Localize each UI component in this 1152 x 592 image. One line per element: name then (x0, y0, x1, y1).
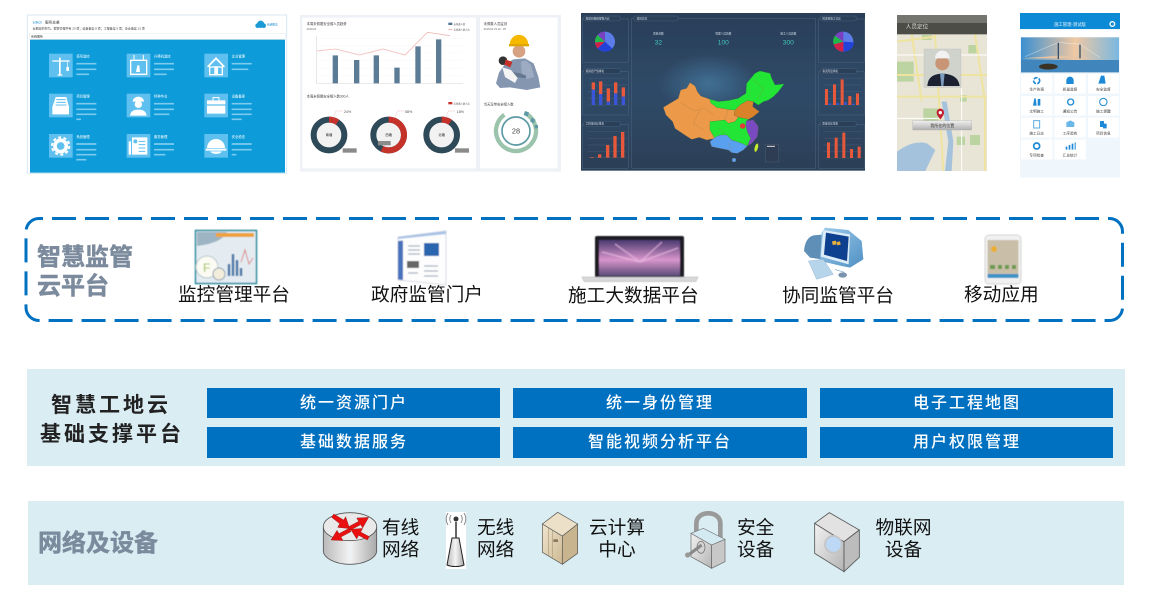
panel heading: 智慧监管 (37, 244, 133, 271)
app menu grid: 项目信息 (1096, 130, 1111, 135)
tile: enterprise (204, 54, 252, 77)
label: security devices: 安全 (737, 517, 775, 538)
button: resource portal: 统一资源门户 (300, 393, 408, 412)
panel titles: 客流月度排名 (822, 69, 839, 73)
donut: north (426, 110, 469, 153)
icon: router (323, 513, 377, 564)
panel titles: 项目总览 (637, 16, 648, 20)
donut: north: 18% (457, 110, 465, 114)
button: base data service (207, 427, 500, 458)
button: video analysis: 智能视频分析平台 (588, 432, 732, 451)
panel frames (582, 18, 864, 168)
bars right bottom (827, 133, 861, 158)
map roads and water (897, 34, 987, 171)
panel titles: 按资质产值排名 (586, 69, 605, 73)
label: wired network: 有线 (382, 517, 419, 538)
icon: monitoring screen (196, 230, 256, 284)
donut: west: 58% (405, 110, 413, 114)
button: engineering map (820, 388, 1113, 418)
label: wireless network: 无线 (477, 517, 514, 538)
label: IoT devices (876, 517, 931, 560)
label: collaborative platform: 协同监管平台 (782, 285, 894, 306)
tile: safety: 安全检查 (232, 134, 246, 139)
donut: west: 西塘 (385, 132, 393, 137)
panel heading: 云平台 (37, 272, 109, 300)
tile: elevator: 升降机监控 (154, 54, 171, 59)
screenshot: mobile app (1020, 13, 1120, 178)
portal header text: 服务总桌 (45, 20, 60, 25)
button: resource portal (207, 388, 500, 418)
label: construction big data platform: 施工大数据平台 (568, 285, 699, 306)
app menu grid: 质量监督 (1063, 87, 1078, 92)
label: cloud data center: 云计算 (589, 517, 645, 538)
tile: records: 服务管理 (154, 134, 168, 139)
location button: 我所在的位置 (930, 122, 954, 128)
icon: laptop (582, 236, 698, 282)
app menu grid (1021, 74, 1119, 159)
panel titles: 按项目规模报警占比 (586, 16, 610, 20)
label: wireless network: 网络 (477, 539, 514, 560)
screenshot: big data map (581, 13, 865, 171)
icon: smartphone (985, 235, 1021, 284)
platform heading (40, 394, 184, 446)
donut title: 本周未佩戴安全帽人数300人 (307, 94, 350, 99)
chart title (307, 21, 347, 31)
app menu grid: 施工提醒 (1096, 108, 1111, 113)
app menu grid: 汇总统计 (1063, 152, 1078, 157)
screenshot: personnel location phone (897, 15, 987, 171)
icon: monitoring screen: F (203, 261, 210, 275)
icon: padlock (685, 513, 725, 568)
portal header text (33, 20, 145, 31)
label: security devices: 设备 (737, 539, 775, 560)
panel: base support platform (27, 369, 1125, 466)
button: engineering map: 电子工程地图 (913, 394, 1021, 412)
stats: 管理人员总数 (715, 31, 732, 35)
stats: 300 (783, 40, 794, 47)
icon: government portal window (398, 231, 446, 285)
panel: network and devices (28, 501, 1124, 585)
chart title: 本周未佩戴安全帽人员趋势 (307, 21, 347, 26)
banner photo (1021, 37, 1119, 72)
tile: system: 系统管理 (76, 134, 90, 139)
donut legend: 未佩戴人数占比 (454, 101, 471, 105)
label: wireless network (477, 517, 514, 560)
label: wired network: 网络 (382, 539, 419, 560)
portal header text: 近期应的你为。据警管理共有 20 项；设备备案 8 项；工程备案 9 项；企业备案 13 项 (33, 26, 145, 31)
cloud icon (255, 21, 278, 28)
button: base data service: 基础数据服务 (300, 433, 408, 451)
donut: north: 北塘 (438, 132, 446, 137)
icon: server cabinet (542, 512, 578, 564)
tile: records (127, 134, 174, 158)
location button (913, 121, 972, 130)
chart legend: 未佩戴人数 (454, 22, 466, 26)
stats: 32 (655, 40, 662, 47)
tile: project: 项目管理 (76, 94, 90, 99)
label: security devices (737, 517, 775, 560)
app menu grid: 文明施工 (1029, 108, 1044, 113)
button: video analysis (513, 427, 807, 458)
panel titles (584, 16, 856, 126)
tile: project (49, 94, 96, 119)
tile: elevator (127, 54, 174, 77)
label: monitoring platform: 监控管理平台 (178, 284, 290, 305)
panel: smart supervision cloud platform (26, 218, 1122, 320)
monitoring heading (484, 21, 508, 31)
portrait (924, 49, 961, 87)
tile: crane: 塔吊监控 (76, 54, 90, 59)
count ring (489, 104, 543, 158)
screenshot: safety helmet dashboard (300, 15, 561, 172)
monitoring heading: 未佩戴人员监测 (484, 21, 508, 26)
panel titles: 工程量对比排名 (586, 122, 605, 126)
stats: 100 (718, 40, 729, 47)
label: wired network (382, 517, 419, 560)
tile: equipment: 设备备案 (232, 94, 246, 99)
tile: enterprise: 企业管理 (232, 54, 246, 59)
icon: wireless antenna (446, 512, 466, 569)
tile: safety (204, 134, 252, 158)
count ring: 28 (512, 127, 520, 136)
icon: IoT device box (815, 513, 859, 572)
chart title: 2018.04 (307, 27, 317, 31)
service bar (29, 33, 285, 39)
app menu grid: 施工日志 (1029, 130, 1044, 135)
app menu grid: 工序验收 (1063, 130, 1078, 135)
count heading: 当天没带安全帽人数 (484, 101, 514, 106)
label: IoT devices: 物联网 (876, 517, 931, 538)
screenshot: desktop portal (27, 15, 287, 173)
worker figure (496, 35, 540, 90)
donut: south (314, 110, 357, 153)
tile: special work: 特种作业 (154, 94, 168, 99)
label: mobile app: 移动应用 (964, 284, 1039, 305)
service bar: 系统服务 (31, 33, 43, 38)
label: IoT devices: 设备 (885, 539, 922, 560)
platform heading: 智慧工地云 (51, 394, 171, 417)
network heading: 网络及设备 (38, 529, 158, 557)
south sea inset (766, 144, 778, 162)
stats: 项目总数 (653, 31, 664, 35)
chart legend (448, 22, 471, 31)
icon: desktop computer (804, 228, 863, 279)
label: government portal: 政府监管门户 (371, 284, 483, 305)
right pie (833, 32, 854, 52)
panel heading (37, 244, 133, 300)
title bar (897, 15, 987, 34)
button: identity management (513, 388, 807, 418)
label: cloud data center: 中心 (598, 539, 636, 560)
blue panel (30, 40, 285, 173)
donut legend (448, 101, 471, 105)
map of China (663, 71, 784, 162)
bars bottom left (590, 132, 624, 158)
stats (653, 31, 797, 47)
button: permission management (820, 427, 1113, 458)
location pin (937, 109, 944, 119)
app menu grid: 安全监督 (1096, 87, 1111, 92)
app header: 施工管理-测试版 (1054, 21, 1087, 28)
donut: west (373, 110, 413, 150)
app menu grid: 专项检查 (1029, 152, 1044, 157)
button: identity management: 统一身份管理 (606, 393, 714, 412)
button: permission management: 用户权限管理 (913, 432, 1021, 451)
cloud icon: 系统图表 (267, 23, 278, 27)
chart grid lines (588, 78, 862, 158)
monitoring heading: 2018.04.23 10 : 25 (484, 27, 506, 31)
donut: south: 24% (344, 110, 352, 114)
notice bar (1020, 30, 1120, 37)
stacked bars (592, 81, 625, 105)
tile: system (49, 134, 96, 160)
app header (1020, 13, 1120, 29)
bar and line chart (317, 32, 463, 83)
portal header text: sdkcn (33, 21, 42, 25)
stats: 施工人员总数 (780, 31, 797, 35)
donut: south: 南塘 (326, 132, 333, 137)
platform heading: 基础支撑平台 (40, 422, 184, 446)
label: cloud data center (589, 517, 645, 560)
tile: equipment (204, 94, 252, 119)
tile: crane (49, 54, 96, 77)
panel titles: 按项目施工占比 (822, 16, 841, 20)
tile: special work (127, 94, 174, 117)
panel titles: 质量对比排名 (822, 122, 839, 126)
bars right middle (825, 79, 859, 105)
app menu grid: 生产协调 (1029, 87, 1044, 92)
left pie (595, 32, 615, 52)
title bar: 人员定位 (906, 23, 929, 31)
app menu grid: 通知公告 (1063, 108, 1078, 113)
chart legend: 未佩戴人数占比 (454, 27, 471, 31)
